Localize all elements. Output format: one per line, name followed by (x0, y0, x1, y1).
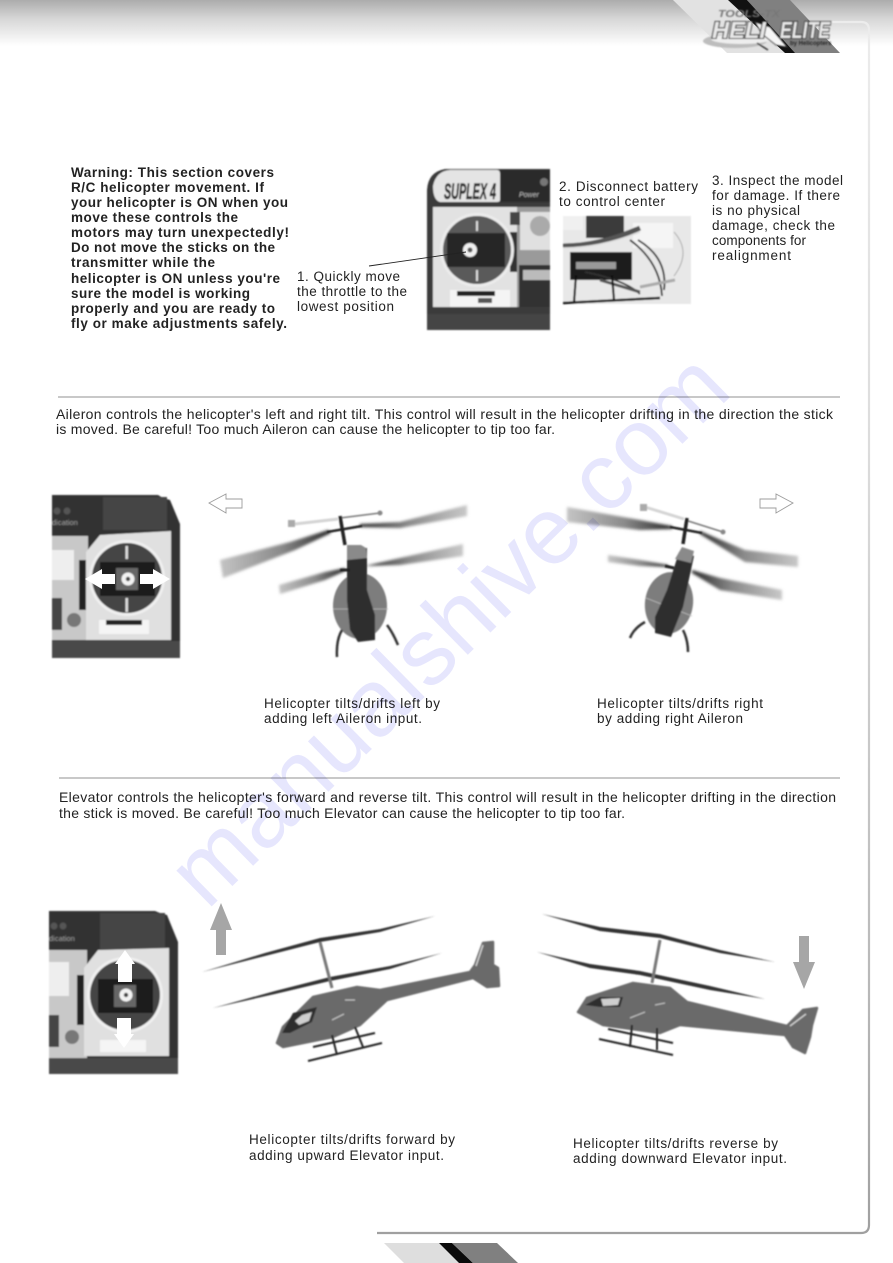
warning text block: your helicopter is ON when you (71, 195, 288, 210)
caption: forward elevator: Helicopter tilts/drifts forward by (249, 1132, 455, 1147)
warning text block: fly or make adjustments safely. (71, 316, 287, 331)
caption: left aileron: Helicopter tilts/drifts left by (264, 696, 440, 711)
warning text block: move these controls the (71, 210, 238, 225)
step 3 text: for damage. If there (712, 188, 840, 203)
step 2 text: 2. Disconnect battery (559, 179, 698, 194)
helicopter side view nose up (202, 916, 499, 1061)
step 1 text: 1. Quickly move (297, 269, 400, 284)
step 1 text (297, 269, 407, 314)
warning text block: sure the model is working (71, 286, 250, 301)
step 1 text: lowest position (297, 299, 394, 314)
step 3 text: damage, check the (712, 218, 835, 233)
step 2 text: to control center (559, 194, 666, 209)
transmitter photo: throttle: Power (519, 192, 540, 199)
caption: reverse elevator: Helicopter tilts/drifts reverse by (573, 1136, 778, 1151)
logo: header stripes and Heli-Elite mark (673, 0, 840, 53)
warning text block: R/C helicopter movement. If (71, 180, 264, 195)
warning text block: Warning: This section covers (71, 165, 274, 180)
step 3 text (712, 173, 843, 263)
caption: reverse elevator: adding downward Elevator input. (573, 1151, 787, 1166)
step 3 text: realignment (712, 248, 791, 263)
aileron description (56, 406, 834, 437)
warning text block (71, 165, 289, 331)
photo: battery and control center (563, 216, 691, 304)
helicopter front view tilting right (567, 504, 798, 652)
warning text block: properly and you are ready to (71, 301, 275, 316)
caption: left aileron: adding left Aileron input. (264, 711, 422, 726)
step 3 text: is no physical (712, 203, 800, 218)
transmitter photo: throttle (427, 169, 550, 330)
leader line to throttle stick (369, 252, 466, 266)
caption: right aileron (597, 696, 763, 726)
icon: grey up arrow (210, 903, 232, 955)
icon: left right stick arrows (85, 569, 170, 589)
aileron description: is moved. Be careful! Too much Aileron can cause the helicopter to tip too far. (56, 421, 555, 437)
transmitter photo: aileron (52, 495, 180, 658)
warning text block: transmitter while the (71, 255, 215, 270)
icon: outlined right arrow (760, 494, 793, 513)
logo: header stripes and Heli-Elite mark: HELI (712, 17, 767, 43)
caption: left aileron (264, 696, 440, 726)
logo: header stripes and Heli-Elite mark: ELITE (780, 17, 831, 43)
watermark: manualshive.com (147, 332, 749, 926)
logo: header stripes and Heli-Elite mark: TOOLS-TX (718, 9, 782, 20)
icon: outlined left arrow (209, 494, 242, 513)
step 2 text (559, 179, 698, 209)
caption: right aileron: Helicopter tilts/drifts right (597, 696, 763, 711)
transmitter photo: elevator: dication (49, 934, 75, 943)
step 3 text: 3. Inspect the model (712, 173, 843, 188)
elevator description (59, 789, 836, 821)
transmitter photo: aileron: dication (52, 518, 78, 527)
warning text block: helicopter is ON unless you're (71, 271, 280, 286)
header gradient band (0, 0, 893, 46)
caption: forward elevator (249, 1132, 455, 1163)
icon: grey down arrow (793, 936, 815, 989)
caption: right aileron: by adding right Aileron (597, 711, 743, 726)
transmitter photo: throttle: SUPLEX 4 (444, 179, 496, 204)
elevator description: Elevator controls the helicopter's forward and reverse tilt. This control will result in the helicopter drifting in the direction (59, 789, 836, 805)
footer stripes (384, 1243, 518, 1263)
elevator description: the stick is moved. Be careful! Too much Elevator can cause the helicopter to tip too far. (59, 805, 625, 821)
logo: header stripes and Heli-Elite mark: by Helicopters (790, 41, 832, 47)
caption: reverse elevator (573, 1136, 787, 1166)
warning text block: Do not move the sticks on the (71, 240, 275, 255)
transmitter photo: elevator (49, 911, 178, 1074)
icon: up down stick arrows (114, 950, 135, 1048)
page panel border (377, 22, 869, 1233)
warning text block: motors may turn unexpectedly! (71, 225, 289, 240)
step 3 text: components for (712, 233, 806, 248)
aileron description: Aileron controls the helicopter's left and right tilt. This control will result in the helicopter drifting in the direction the stick (56, 406, 834, 422)
helicopter side view nose down (537, 914, 817, 1055)
step 1 text: the throttle to the (297, 284, 407, 299)
caption: forward elevator: adding upward Elevator input. (249, 1148, 444, 1163)
helicopter front view tilting left (220, 505, 467, 657)
